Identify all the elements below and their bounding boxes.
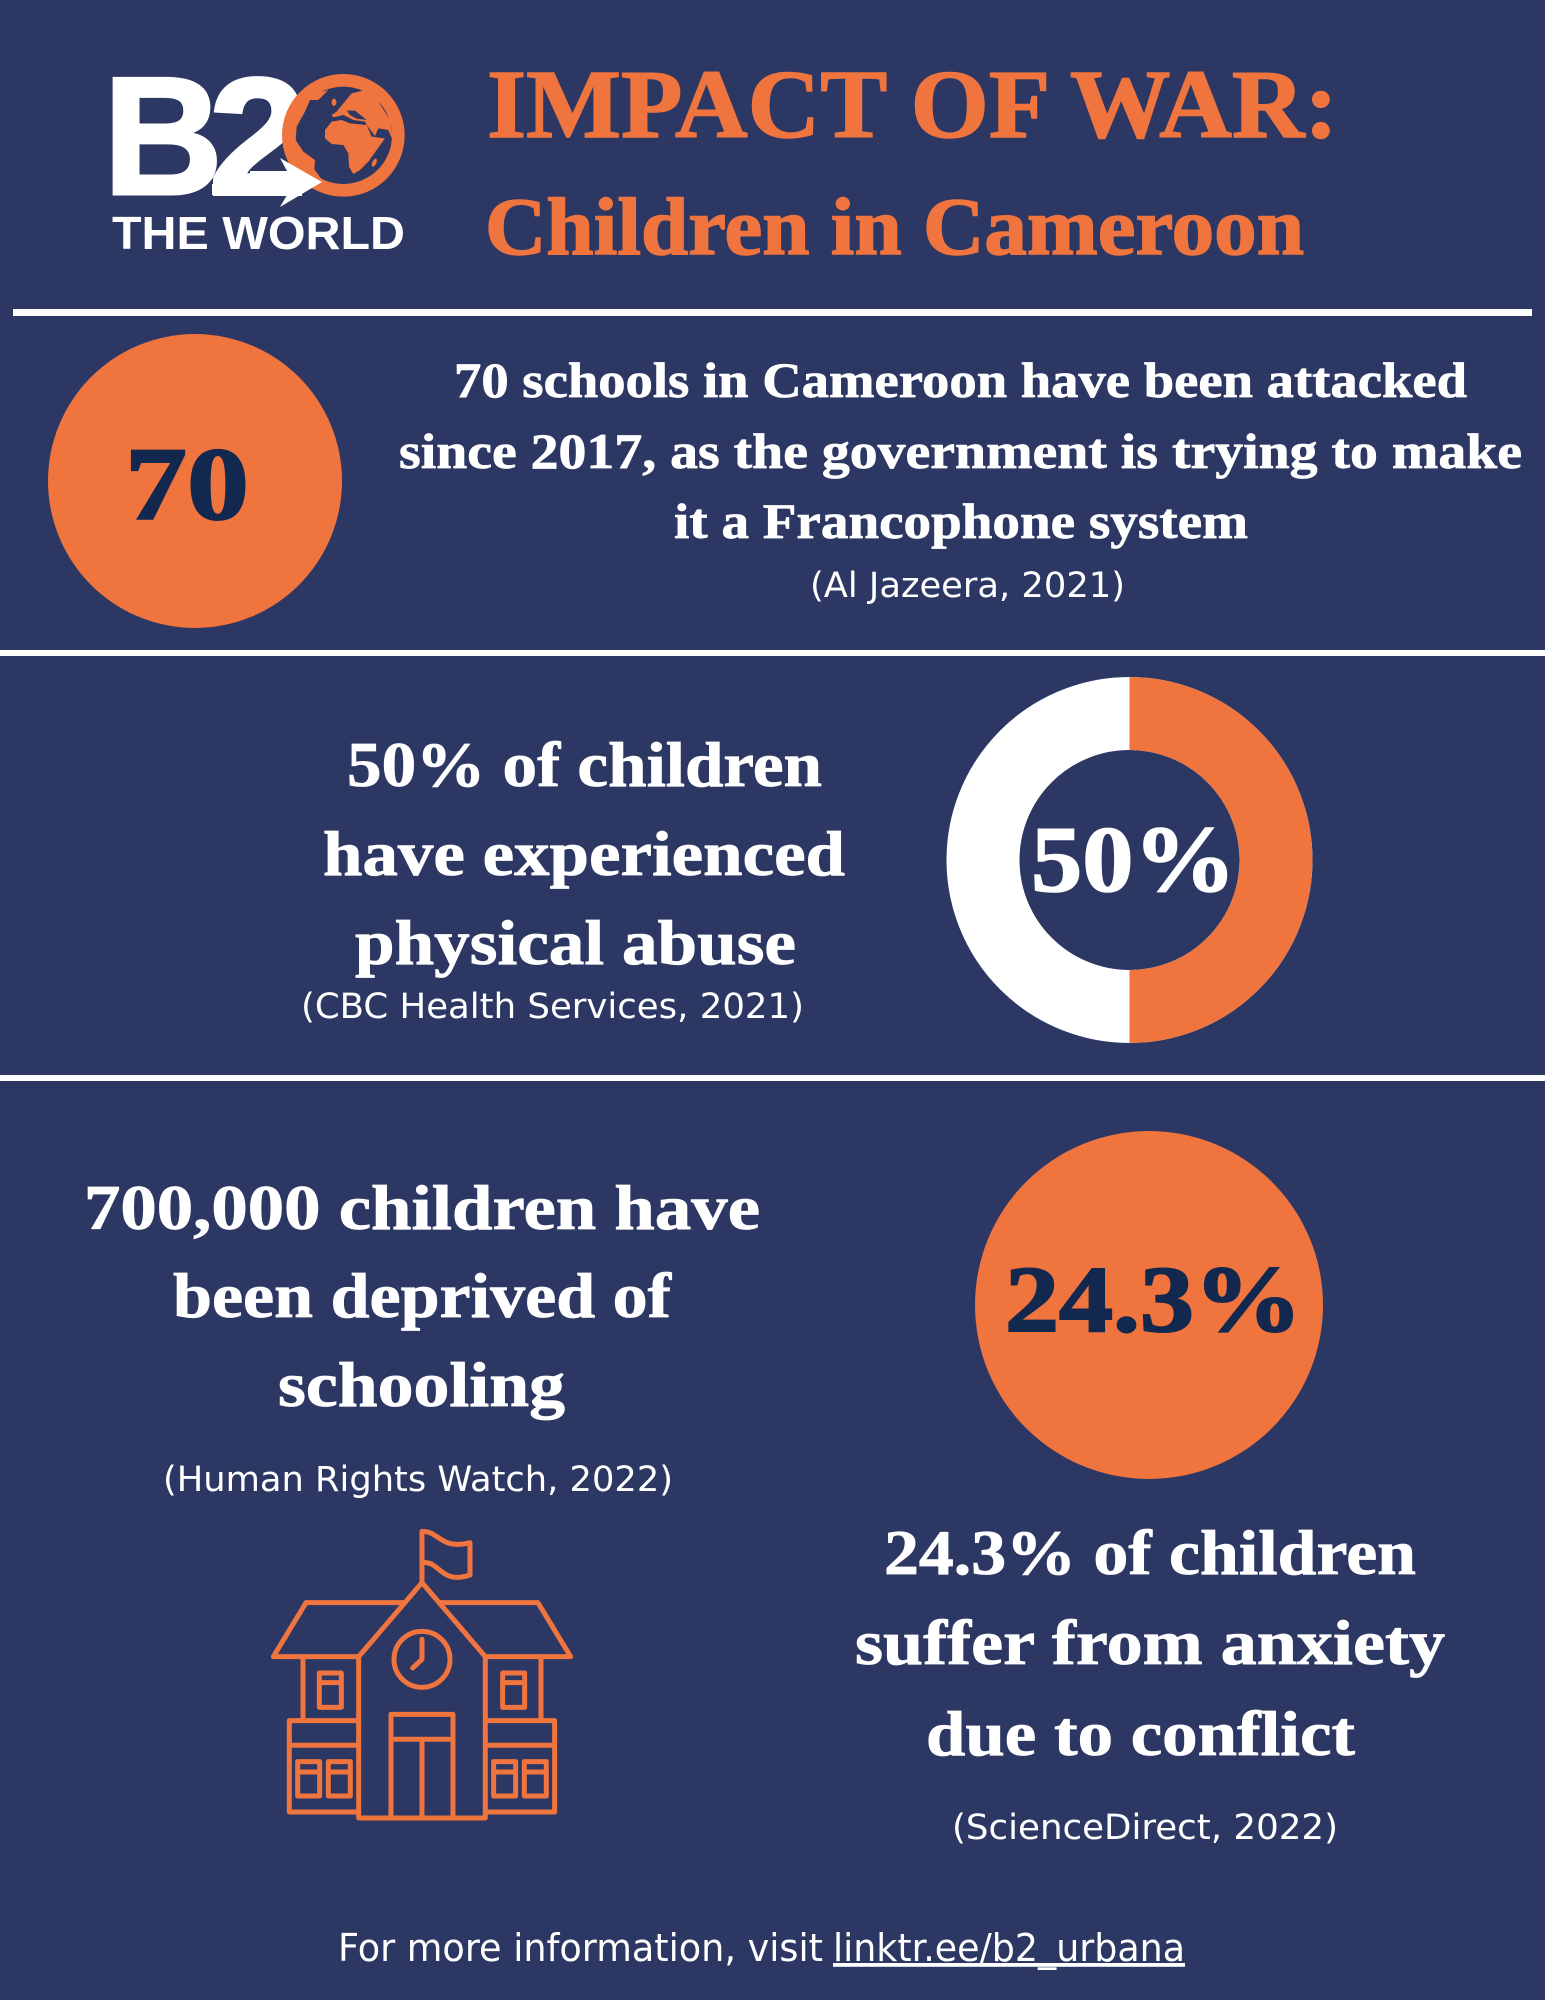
title [485, 51, 1338, 272]
text: deprived of schooling: been deprived of [173, 1260, 672, 1331]
source: ScienceDirect: (ScienceDirect, 2022) [952, 1808, 1338, 1848]
stat circle: 70: 70 [125, 427, 249, 542]
text: anxiety: suffer from anxiety [855, 1607, 1445, 1678]
stat circle: 24.3%: 24.3% [1005, 1248, 1302, 1352]
panel: 70 schools [48, 334, 1522, 628]
logo tagline: THE WORLD [112, 207, 405, 259]
panel: anxiety [855, 1131, 1445, 1848]
title: Children in Cameroon [485, 181, 1304, 272]
text: schools attacked: it a Francophone system [674, 493, 1248, 549]
text: deprived of schooling: schooling [278, 1349, 565, 1420]
footer: linktr.ee/b2_urbana [833, 1926, 1185, 1970]
source: Al Jazeera: (Al Jazeera, 2021) [810, 566, 1125, 606]
source: CBC Health Services: (CBC Health Services, 2021) [301, 987, 804, 1027]
text: schools attacked: 70 schools in Cameroon have been attacked [454, 352, 1467, 408]
text: anxiety [855, 1517, 1445, 1769]
donut chart: 50% [983, 677, 1312, 1043]
logo arrow [212, 158, 322, 207]
icon: globe [282, 74, 405, 197]
text: physical abuse: physical abuse [355, 907, 796, 978]
text: anxiety: due to conflict [926, 1698, 1356, 1769]
stat circle: 24.3% [975, 1131, 1323, 1479]
text: anxiety: 24.3% of children [884, 1517, 1416, 1588]
footer [338, 1926, 1185, 1970]
stat circle: 70 [48, 334, 342, 628]
title: IMPACT OF WAR: [487, 51, 1338, 159]
logo wordmark B2 [103, 42, 307, 230]
text: deprived of schooling: 700,000 children have [84, 1172, 760, 1243]
logo: B2 The World [103, 42, 405, 259]
logo wordmark B2: B [103, 42, 223, 230]
text: physical abuse: have experienced [323, 818, 845, 889]
footer: For more information, visit [338, 1926, 823, 1970]
text: deprived of schooling [84, 1172, 760, 1420]
text: schools attacked: since 2017, as the government is trying to make [399, 423, 1522, 479]
text: physical abuse: 50% of children [347, 729, 822, 800]
panel: deprived of schooling [84, 1172, 760, 1818]
icon: school building [273, 1531, 571, 1818]
logo wordmark B2: 2 [209, 45, 307, 230]
text: physical abuse [323, 729, 845, 978]
source: Human Rights Watch: (Human Rights Watch, 2022) [163, 1460, 673, 1500]
panel: physical abuse [301, 677, 1312, 1043]
text: schools attacked [399, 352, 1522, 549]
donut chart: 50%: 50% [1031, 808, 1236, 912]
